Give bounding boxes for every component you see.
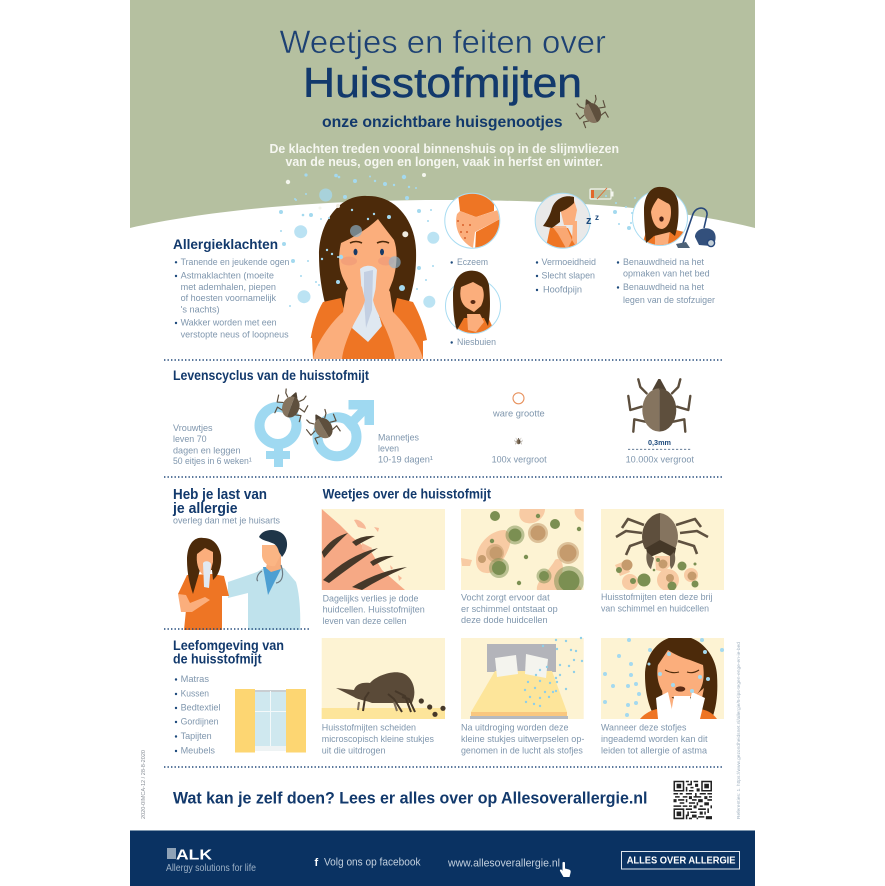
icon: hand cursor [560,862,571,877]
website link: www.allesoverallergie.nl [447,858,560,870]
size: true size: ware grootte [492,409,545,420]
size: 10000x [626,379,694,466]
intro text [270,141,619,169]
facebook link: f [314,857,318,869]
heading: leefomgeving: Leefomgeving van [173,637,284,653]
icon: male symbol [318,400,374,456]
icon: female symbol [260,407,296,467]
panel: mould [461,509,584,596]
captions: row 1: Huisstofmijten eten deze brij [601,592,712,603]
bullets: vermoeidheid: Hoofdpijn [543,285,582,296]
title: Weetjes en feiten over [280,24,606,60]
captions: row 2: ingeademd worden kan dit [601,734,708,745]
bullets: vermoeidheid [536,257,596,296]
title: onze onzichtbare huisgenootjes [322,114,563,131]
text: vrouwtjes: 50 eitjes in 6 weken¹ [173,456,252,467]
bullet: eczeem: Eczeem [457,257,488,268]
bullets: benauwdheid: opmaken van het bed [623,269,710,280]
face [339,219,397,298]
list: allergieklachten: Tranende en jeukende ogen [181,257,289,268]
icon: mite on female symbol [273,387,311,422]
list: allergieklachten [175,257,289,340]
heading: heb je last: je allergie [172,500,238,517]
icon circle: eczeem [445,193,500,252]
list: leefomgeving: Tapijten [181,731,212,742]
captions: row 1: van schimmel en huidcellen [601,604,709,615]
heading: allergieklachten: Allergieklachten [173,236,278,252]
captions: row 2: Na uitdroging worden deze [461,723,568,734]
panel: inhaling [601,636,724,719]
patient [178,574,229,630]
button: alles over allergie: ALLES OVER ALLERGIE [627,856,736,867]
tissue [352,266,382,342]
divider [164,766,724,768]
heading: heb je last: overleg dan met je huisarts [173,515,280,526]
text: mannetjes: Mannetjes [378,432,419,443]
captions: row 2: microscopisch kleine stukjes [322,734,434,745]
list: leefomgeving: Gordijnen [181,717,218,728]
bullets: benauwdheid [617,257,715,306]
shirt [311,298,427,359]
heading: leefomgeving [173,637,284,666]
panel: droppings [322,638,446,719]
text: mannetjes: leven [378,444,399,455]
captions: row 2: leiden tot allergie of astma [601,745,708,756]
list: allergieklachten: met ademhalen, piepen [181,282,276,293]
captions: row 1: er schimmel ontstaat op [461,604,558,615]
list: allergieklachten: Wakker worden met een [181,318,277,329]
list: leefomgeving: Meubels [181,745,215,756]
size: true size [492,393,545,420]
size: 10000x: 10.000x vergroot [626,455,694,466]
illustration: patient and doctor [178,530,300,630]
captions: row 2: uit die uitdrogen [322,745,386,756]
text: mannetjes: 10-19 dagen¹ [378,455,433,466]
text: vrouwtjes [173,423,252,467]
panel: bed [461,637,584,719]
panel: skin cells [322,509,445,590]
list: allergieklachten: of hoesten voornamelijk [181,293,276,304]
intro text: De klachten treden vooral binnenshuis op in de slijmvliezen [270,141,619,156]
text: vrouwtjes: leven 70 [173,434,207,445]
list: allergieklachten: 's nachts) [181,305,220,316]
heading: leefomgeving: de huisstofmijt [173,650,262,666]
list: leefomgeving: Kussen [181,688,209,699]
size: 100x [492,438,547,466]
captions: row 1 [323,592,712,627]
call to action: Wat kan je zelf doen? Lees er alles over op Allesoverallergie.nl [173,788,648,808]
qr code [674,781,712,819]
icon circle: vermoeidheid [535,193,590,250]
list: allergieklachten: Astmaklachten (moeite [181,271,274,282]
print code: 2020-0IMCA-12 / 28-8-2020 [141,750,147,819]
text: mannetjes [378,432,433,466]
text: vrouwtjes: Vrouwtjes [173,423,213,434]
list: leefomgeving: Bedtextiel [181,703,220,714]
icon: z z: z [595,213,599,222]
captions: row 2: Huisstofmijten scheiden [322,723,416,734]
hair [319,196,416,330]
hands and arms [313,284,365,359]
logo: ALK: Allergy solutions for life [166,863,256,874]
divider [164,476,722,478]
doctor coat [228,568,300,630]
bullets: vermoeidheid: Slecht slapen [542,271,595,282]
green header background [130,0,755,228]
icon circle: benauwdheid [632,187,688,248]
bullets: benauwdheid: legen van de stofzuiger [623,295,715,306]
heading: heb je last [172,486,280,526]
panel: mite eating [601,509,724,591]
allergen particles [279,173,636,308]
captions: row 1: deze dode huidcellen [461,615,548,626]
icon: low battery [590,188,614,199]
icon: mite on male symbol [302,407,342,445]
bullets: benauwdheid: Benauwdheid na het [623,257,704,268]
size: 100x: 100x vergroot [492,455,547,466]
bullet: niesbuien: Niesbuien [457,337,496,348]
divider [164,359,722,361]
captions: row 1: leven van deze cellen [323,616,406,627]
references: Referenties: 1. https://www.gezondheidsnet.nl/allergie/5-tips-tegen-enge-en-ie-bed [736,641,741,819]
heading: levenscyclus: Levenscyclus van de huisstofmijt [173,367,369,383]
illustration: sneezing woman [311,196,427,359]
eyes [354,249,358,255]
bullets: vermoeidheid: Vermoeidheid [542,257,596,268]
logo: ALK: ALK [176,846,212,863]
title [280,24,606,131]
icon: z z [586,213,599,227]
icon: header mite [573,93,610,129]
heading: heb je last: Heb je last van [173,486,267,503]
facebook link: Volg ons op facebook [324,857,421,869]
captions: row 2: kleine stukjes uitwerpselen op- [461,734,584,745]
list: allergieklachten: verstopte neus of loopneus [181,329,289,340]
list: leefomgeving [175,674,220,756]
heading: weetjes: Weetjes over de huisstofmijt [323,485,491,501]
intro text: van de neus, ogen en longen, vaak in herfst en winter. [286,154,603,169]
bullets: benauwdheid: Benauwdheid na het [623,282,704,293]
logo: ALK [166,846,256,874]
captions: row 2: genomen in de lucht als stofjes [461,745,583,756]
button: alles over allergie [622,852,740,869]
captions: row 1: Dagelijks verlies je dode [323,594,418,605]
cheeks [341,256,357,266]
captions: row 1: huidcellen. Huisstofmijten [323,605,425,616]
size: 10000x: 0,3mm [648,440,671,447]
icon circle: niesbuien [446,271,500,335]
list: leefomgeving: Matras [181,674,209,685]
text: vrouwtjes: dagen en leggen [173,445,240,456]
captions: row 1: Vocht zorgt ervoor dat [461,593,550,604]
title: Huisstofmijten [303,59,582,106]
icon: z z: z [586,215,592,227]
captions: row 2 [322,723,708,756]
footer bar [130,830,755,886]
captions: row 2: Wanneer deze stofjes [601,723,687,734]
divider [164,628,309,630]
icon: vacuum cleaner [676,208,716,248]
icon: window with curtains [235,689,306,752]
